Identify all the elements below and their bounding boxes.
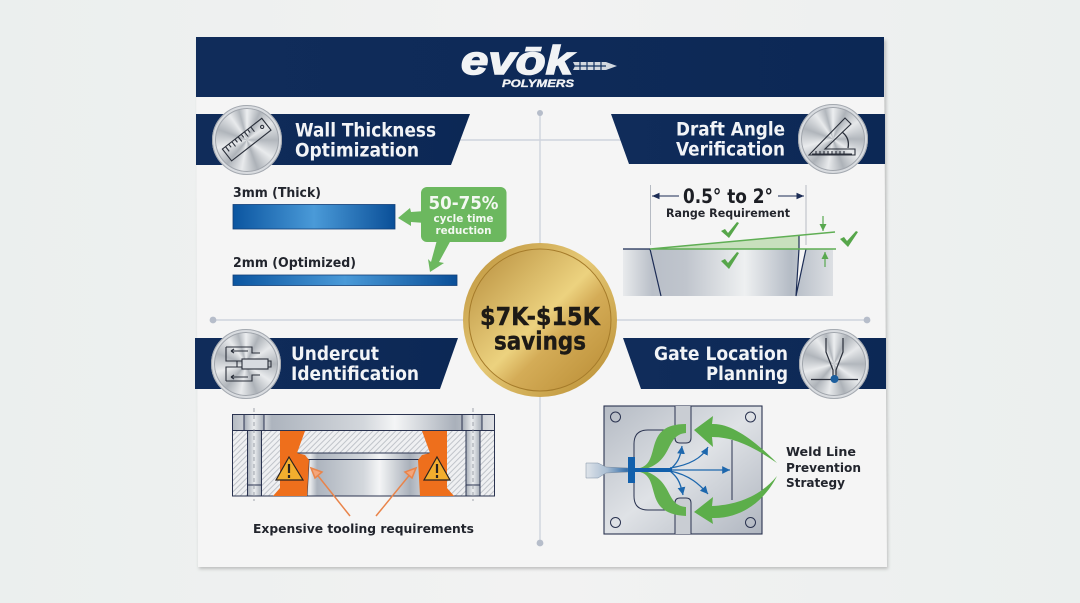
icon: warning triangles	[276, 457, 450, 480]
bar: 2mm	[233, 275, 457, 286]
panel: draft angle	[611, 104, 885, 296]
arrows: green weld line	[694, 416, 777, 524]
bar: 3mm	[233, 204, 395, 229]
caption: weld line: Weld Line	[786, 444, 856, 459]
callout: cycle time reduction: reduction	[436, 225, 492, 237]
icon: ruler disc	[212, 105, 282, 175]
green flow bands	[640, 424, 686, 516]
heading: undercut: Identification	[291, 364, 419, 385]
label: 3mm: 3mm (Thick)	[233, 186, 321, 201]
caption: tooling: Expensive tooling requirements	[253, 521, 474, 536]
heading: draft angle: Verification	[676, 140, 785, 160]
header band with logo	[196, 37, 884, 97]
dimension: range: Range Requirement	[666, 206, 790, 220]
callout: cycle time reduction: 50-75%	[428, 194, 498, 214]
panel: gate location	[586, 329, 886, 534]
logo: evok polymers: POLYMERS	[502, 78, 575, 90]
heading: undercut: Undercut	[291, 344, 379, 365]
panel: undercut	[195, 329, 494, 536]
callout: cycle time reduction	[398, 187, 506, 272]
caption: weld line: Prevention	[786, 460, 861, 475]
arrows: tooling	[311, 468, 416, 516]
icon: check marks	[721, 222, 858, 269]
nozzle and gate	[586, 457, 635, 483]
savings medallion: $7K-$15K	[480, 302, 601, 331]
heading: draft angle: Draft Angle	[676, 120, 785, 140]
savings medallion	[463, 243, 617, 397]
banner: wall thickness	[196, 114, 470, 165]
heading: gate: Gate Location	[654, 344, 788, 365]
connector lines	[210, 110, 870, 546]
panel: wall thickness	[196, 105, 506, 286]
banner: undercut	[195, 338, 458, 389]
diagram: draft section	[623, 216, 858, 296]
label: 2mm: 2mm (Optimized)	[233, 256, 356, 271]
heading: wall thickness: Optimization	[295, 140, 419, 162]
heading: wall thickness: Wall Thickness	[295, 120, 436, 142]
poster sheet	[196, 37, 888, 569]
banner: gate	[623, 338, 886, 389]
diagram: undercut section	[232, 408, 494, 501]
dimension: range	[650, 185, 806, 245]
callout: cycle time reduction: cycle time	[434, 213, 494, 225]
icon: gate disc	[799, 329, 869, 399]
logo: evok polymers: evōk	[461, 39, 575, 83]
heading: gate: Planning	[706, 364, 788, 385]
banner: draft angle	[611, 114, 885, 164]
icon: undercut disc	[211, 329, 281, 399]
dimension: range: 0.5° to 2°	[683, 185, 773, 208]
undercut: orange regions	[273, 431, 454, 496]
savings medallion: savings	[494, 326, 586, 356]
logo: evok polymers	[461, 39, 617, 90]
arrows: blue flow	[635, 446, 730, 495]
caption: weld line: Strategy	[786, 475, 845, 490]
icon: protractor disc	[798, 104, 868, 174]
diagram: mold plate	[586, 406, 762, 534]
